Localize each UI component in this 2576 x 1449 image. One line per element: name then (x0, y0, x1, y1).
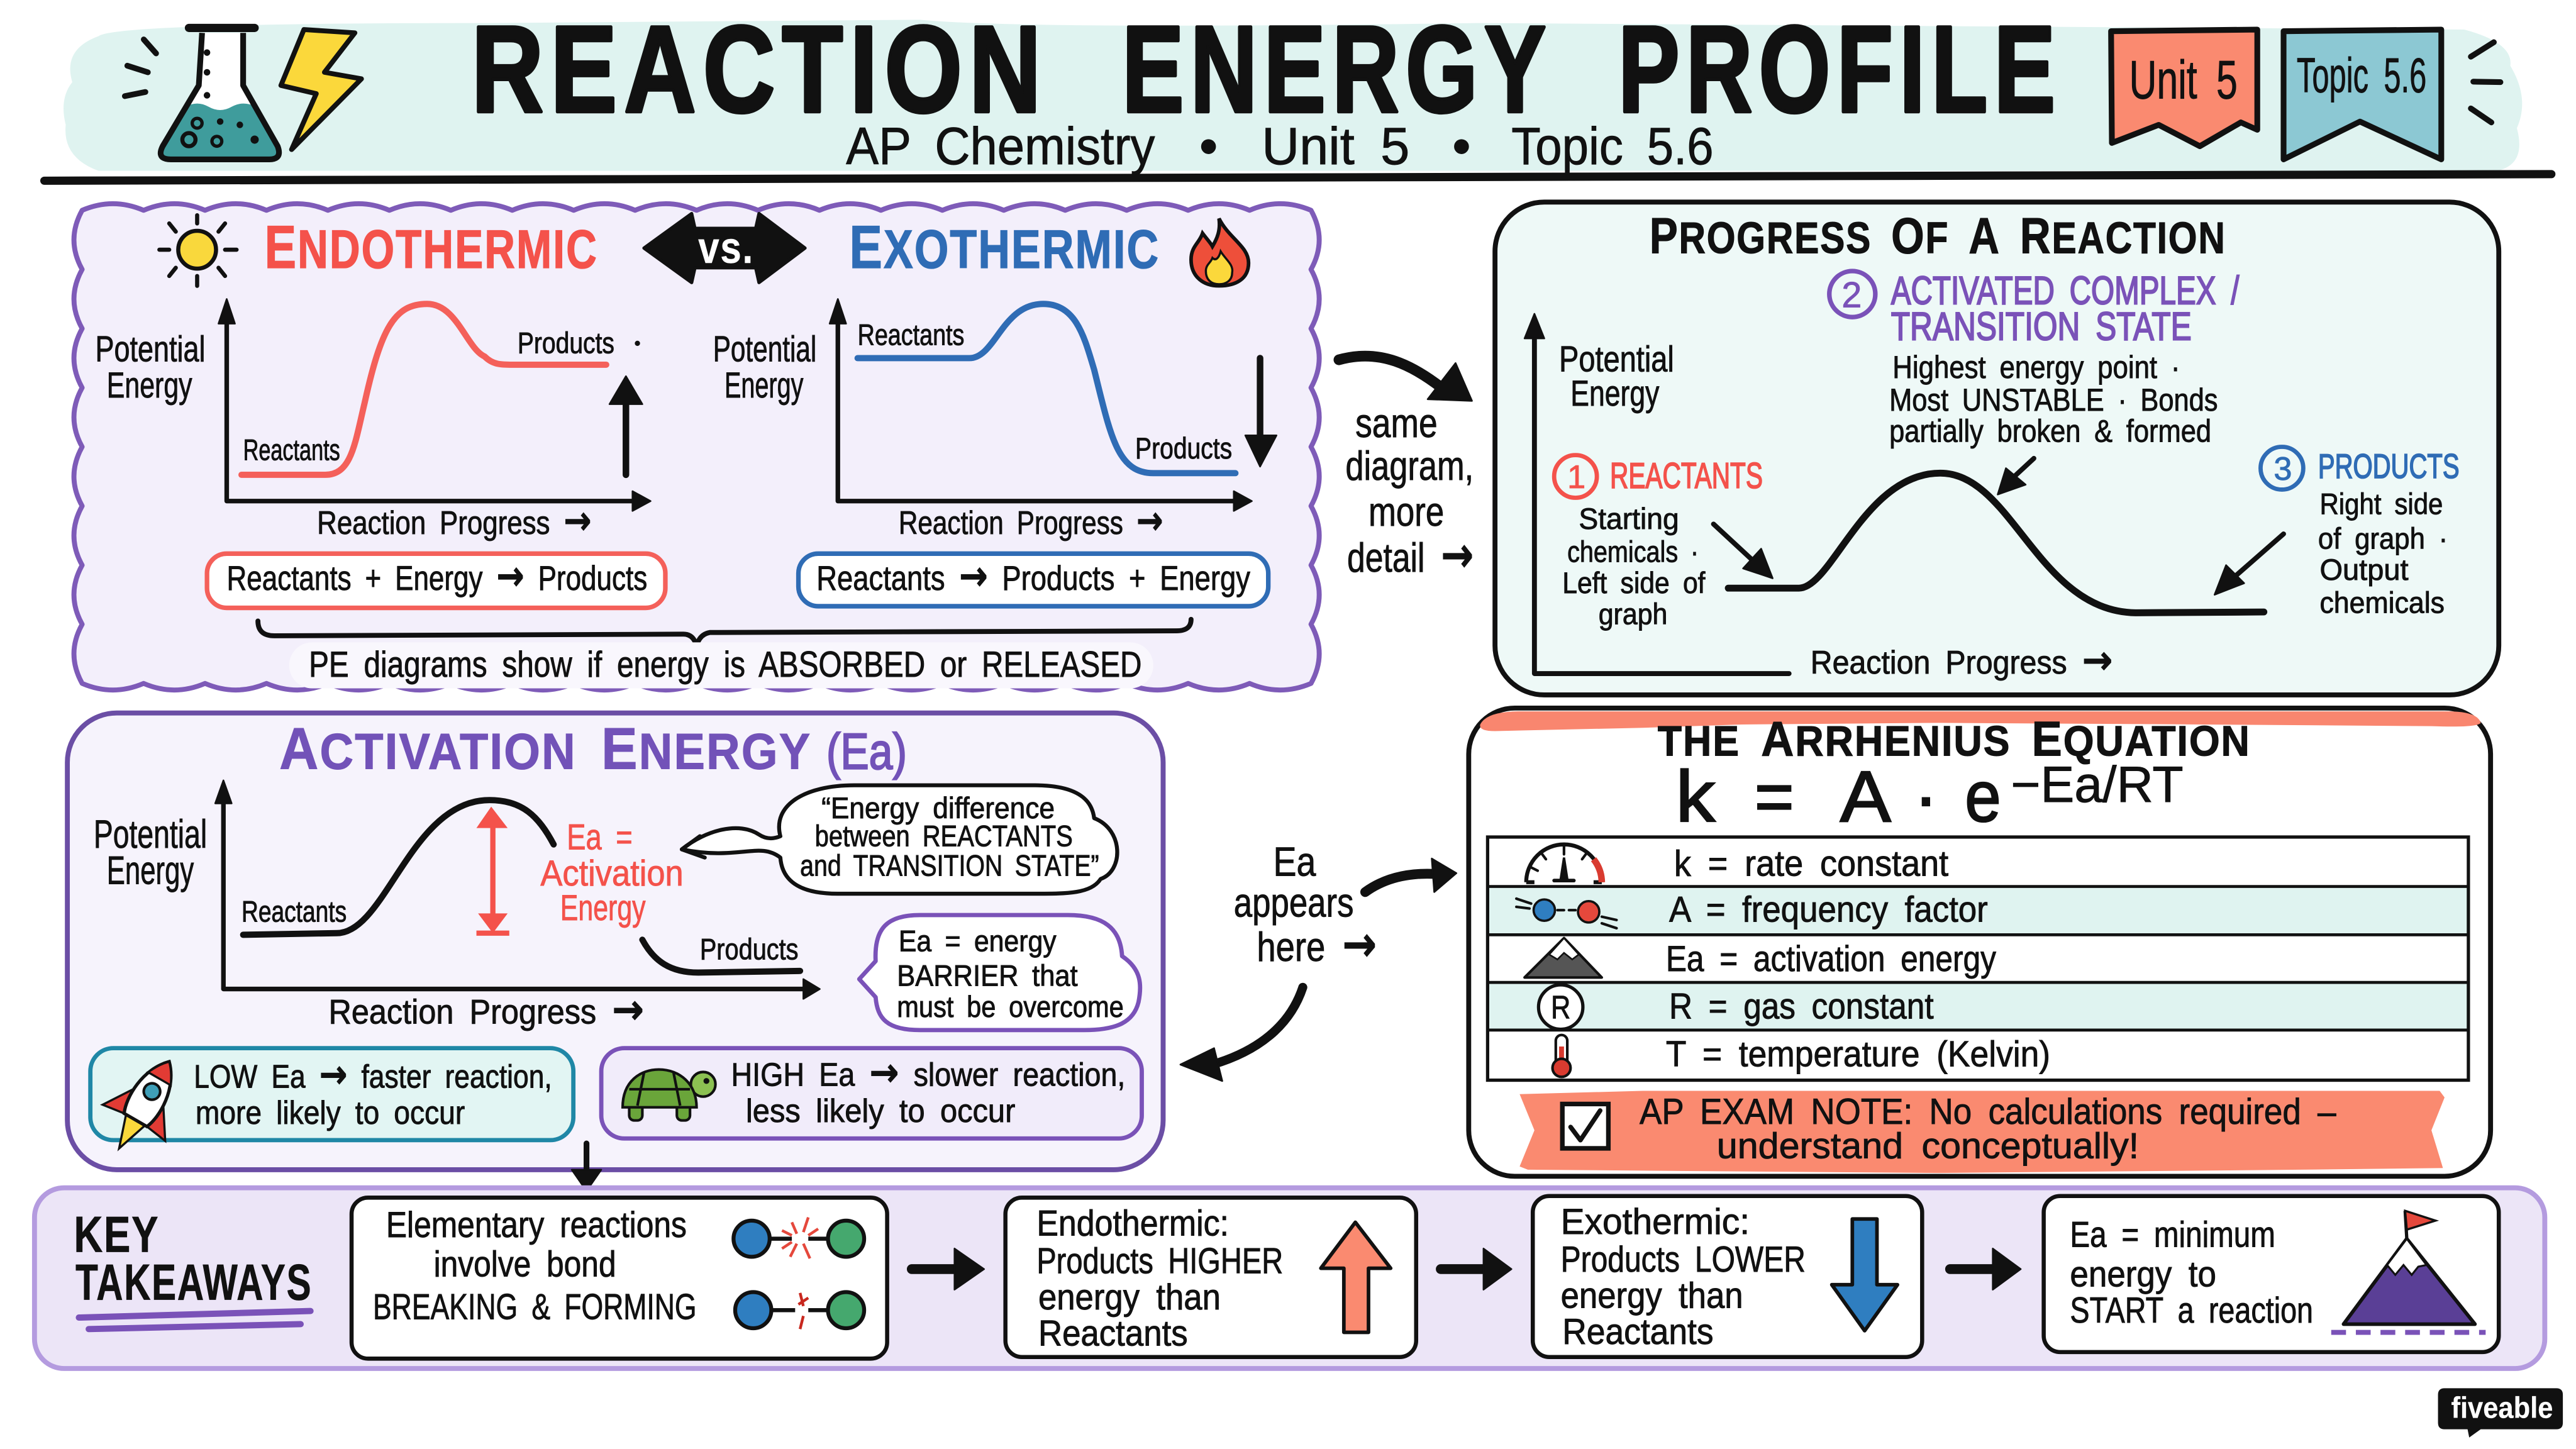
label: reactants: chemicals · (1567, 535, 1699, 568)
card: endothermic takeaway: Reactants (1038, 1313, 1188, 1353)
table: variables: T = temperature (Kelvin) (1666, 1034, 2050, 1074)
callout: energy difference: “Energy difference (821, 791, 1055, 824)
heading: progress of a reaction: PROGRESS OF A REACTION (1650, 208, 2226, 264)
label: reactants: 1 (1567, 459, 1585, 496)
callout: energy barrier: must be overcome (897, 990, 1124, 1023)
card: exothermic takeaway: energy than (1561, 1275, 1743, 1316)
box: high Ea (601, 1048, 1142, 1138)
label: Ea = activation energy: Energy (560, 888, 646, 928)
icon: rocket (88, 1043, 201, 1167)
chart: exothermic energy diagram: Products (1135, 431, 1232, 465)
chart: activation energy curve (94, 780, 820, 1033)
callout: energy barrier (859, 915, 1140, 1030)
arrow: to progress panel (1339, 356, 1472, 401)
card: Ea minimum: Ea = minimum (2070, 1215, 2275, 1255)
box: low Ea (91, 1048, 574, 1140)
heading: endothermic: ENDOTHERMIC (265, 214, 598, 281)
card: exothermic takeaway (1533, 1196, 1922, 1357)
ribbon: Topic 5.6 (2284, 30, 2441, 159)
box: high Ea: less likely to occur (746, 1093, 1015, 1130)
panel: progress of a reaction (1495, 202, 2499, 695)
chart: activation energy curve: Reactants (242, 894, 347, 928)
icon: summit flag (2331, 1211, 2485, 1333)
chart: exothermic energy diagram (713, 299, 1277, 543)
icon: right sparks (2471, 42, 2501, 123)
icon: up arrow (1321, 1223, 1391, 1333)
card: endothermic takeaway: Endothermic: (1036, 1203, 1229, 1243)
label: Ea = activation energy: Ea = (567, 818, 633, 858)
title (472, 1, 2062, 138)
callout: energy difference (682, 786, 1117, 894)
equation: k = A e^-Ea/RT: · (1914, 757, 1938, 837)
chart axes and curve: Reaction Progress → (1811, 637, 2112, 683)
connector text: same diagram, more detail: more (1368, 489, 1444, 535)
banner: AP exam note: AP EXAM NOTE: No calculations required – (1640, 1092, 2336, 1132)
card: Ea minimum (2044, 1196, 2499, 1352)
equation: k = A e^-Ea/RT: e (1965, 757, 2001, 837)
icon: down arrow (1832, 1219, 1897, 1331)
label: activated complex: TRANSITION STATE (1891, 305, 2192, 349)
equation: k = A e^-Ea/RT: −Ea/RT (2011, 757, 2184, 813)
title: PROFILE (1618, 1, 2062, 138)
label: activated complex: Highest energy point · (1892, 350, 2180, 385)
title: ENERGY (1122, 1, 1553, 138)
callout: energy difference: between REACTANTS (815, 819, 1073, 852)
arrow: to products (2214, 534, 2284, 595)
box: low Ea: LOW Ea → faster reaction, (194, 1051, 552, 1097)
card: endothermic takeaway (1006, 1197, 1416, 1357)
arrow: step 1 (912, 1248, 984, 1290)
banner: AP exam note: understand conceptually! (1717, 1126, 2139, 1167)
equation: k = A e^-Ea/RT: A (1840, 757, 1891, 837)
ribbon: Unit 5 (2111, 30, 2257, 146)
card: elementary reactions: involve bond (434, 1245, 616, 1285)
subtitle: Topic 5.6 (1511, 116, 1714, 175)
icon: turtle (623, 1070, 716, 1121)
logo: fiveable (2438, 1388, 2563, 1438)
card: elementary reactions (352, 1197, 887, 1358)
chart: endothermic energy diagram: Reactants (243, 433, 340, 466)
table: variables: A = frequency factor (1669, 889, 1988, 930)
chart: activation energy curve: Potential (94, 813, 207, 857)
label: activated complex (1829, 269, 2240, 449)
icon: lightning bolt (281, 30, 362, 150)
table: variables (1487, 837, 2468, 1080)
table: variables: Ea = activation energy (1666, 939, 1996, 979)
label: products: Output (2319, 553, 2409, 586)
card: exothermic takeaway: Products LOWER (1561, 1240, 1806, 1280)
panel: Arrhenius equation (1468, 708, 2490, 1176)
heading: activation energy: (Ea) (826, 724, 907, 780)
table: variables: k = rate constant (1674, 843, 1948, 884)
header band (45, 19, 2551, 180)
equation: exothermic: Reactants → Products + Energy (816, 552, 1250, 600)
table: variables: R = gas constant (1669, 987, 1934, 1027)
chart: exothermic energy diagram: Reaction Progress → (899, 497, 1163, 543)
card: exothermic takeaway: Reactants (1562, 1312, 1714, 1352)
label: activated complex: ACTIVATED COMPLEX / (1891, 269, 2240, 313)
arrow: activation energy height (477, 807, 509, 933)
chart: exothermic energy diagram: Potential (713, 330, 816, 370)
card: elementary reactions: Elementary reactions (386, 1205, 687, 1245)
label: reactants: graph (1599, 597, 1667, 631)
chart: endothermic energy diagram: Reaction Progress → (317, 497, 591, 543)
chart axes and curve: Potential (1559, 339, 1674, 379)
label: products: chemicals (2319, 586, 2445, 619)
arrow: step 2 (1441, 1248, 1511, 1290)
label: Ea = activation energy (540, 818, 684, 928)
panel: endothermic vs exothermic (74, 204, 1319, 690)
card: Ea minimum: energy to (2070, 1254, 2216, 1294)
label: products: PRODUCTS (2318, 447, 2460, 486)
label: products (2260, 447, 2460, 619)
heading: Arrhenius equation: THE ARRHENIUS EQUATION (1658, 711, 2251, 767)
box: low Ea: more likely to occur (196, 1095, 465, 1131)
icon: R: R (1551, 990, 1570, 1026)
icon: thermometer (1553, 1035, 1570, 1077)
chart: endothermic energy diagram (96, 299, 650, 543)
arrow: down to takeaways (572, 1143, 601, 1191)
icon: sun (159, 215, 236, 286)
callout: energy barrier: Ea = energy (899, 924, 1057, 957)
subtitle: • (1199, 116, 1218, 175)
connector text: same diagram, more detail (1345, 400, 1474, 584)
title: REACTION (472, 1, 1048, 138)
connector text: Ea appears here: appears (1234, 880, 1353, 926)
label: products: Right side (2319, 487, 2443, 521)
subtitle: • (1452, 116, 1470, 175)
chart: exothermic energy diagram: Energy (724, 365, 804, 406)
connector text: same diagram, more detail: same (1355, 400, 1438, 446)
connector text: same diagram, more detail: diagram, (1345, 443, 1474, 489)
arrow: to activation energy (1180, 987, 1303, 1081)
card: Ea minimum: START a reaction (2070, 1291, 2313, 1331)
chart axes and curve: Energy (1570, 374, 1660, 414)
label: activated complex: partially broken & formed (1889, 414, 2211, 449)
label: products: 3 (2273, 451, 2292, 487)
heading: key takeaways: KEY (74, 1207, 159, 1263)
chart: activation energy curve: Products (700, 933, 799, 966)
chart: endothermic energy diagram: Potential (96, 330, 206, 370)
equation: endothermic: Reactants + Energy → Products (226, 552, 647, 600)
icon: flask (160, 28, 279, 159)
ribbon: Topic 5.6: Topic 5.6 (2297, 47, 2426, 103)
label: reactants: REACTANTS (1610, 456, 1763, 496)
connector text: same diagram, more detail: detail → (1347, 526, 1474, 584)
subtitle (846, 116, 1714, 175)
label: reactants: Left side of (1562, 566, 1706, 599)
equation: k = A e^-Ea/RT (1675, 757, 2184, 837)
label: Ea = activation energy: Activation (540, 853, 684, 894)
chart: endothermic energy diagram: Products (518, 326, 614, 360)
panel: key takeaways (35, 1188, 2545, 1368)
card: endothermic takeaway: energy than (1038, 1277, 1221, 1318)
chart: exothermic energy diagram: Reactants (858, 318, 964, 352)
chart axes and curve (1524, 314, 2264, 683)
arrow: step 3 (1950, 1248, 2021, 1290)
icon: bond breaking (733, 1218, 864, 1258)
heading: key takeaways: TAKEAWAYS (75, 1254, 312, 1311)
callout: energy difference: and TRANSITION STATE” (800, 848, 1099, 882)
icon: flame (1191, 218, 1248, 286)
arrow: to reactants (1714, 524, 1773, 579)
ribbon: Unit 5: Unit 5 (2129, 50, 2238, 111)
panel: activation energy (67, 713, 1163, 1191)
icon: vs double arrow (644, 214, 805, 282)
caption: PE diagrams: PE diagrams show if energy is ABSORBED or RELEASED (309, 645, 1142, 685)
label: activated complex: 2 (1841, 275, 1862, 315)
subtitle: AP Chemistry (846, 116, 1155, 175)
arrow: to Arrhenius (1365, 858, 1457, 892)
equation: k = A e^-Ea/RT: k (1675, 757, 1716, 837)
chart: activation energy curve: Reaction Progress → (328, 985, 644, 1033)
label: activated complex: Most UNSTABLE · Bonds (1889, 382, 2218, 418)
card: exothermic takeaway: Exothermic: (1561, 1202, 1750, 1242)
banner: AP exam note (1519, 1091, 2445, 1173)
heading: key takeaways (74, 1207, 312, 1329)
icon: vs double arrow: vs. (698, 223, 754, 272)
icon: left sparks (125, 40, 156, 96)
arrow: to peak (1997, 458, 2034, 494)
callout: energy barrier: BARRIER that (897, 958, 1078, 992)
label: reactants: Starting (1579, 502, 1679, 535)
brace (258, 619, 1191, 646)
icon: mountain (1524, 938, 1602, 977)
equation: k = A e^-Ea/RT: = (1755, 757, 1794, 837)
icon: R (1538, 985, 1583, 1030)
chart: activation energy curve: Energy (107, 848, 194, 892)
icon: bond forming (735, 1292, 864, 1329)
chart: endothermic energy diagram: Energy (107, 365, 192, 406)
icon: gauge (1526, 845, 1602, 882)
card: endothermic takeaway: Products HIGHER (1036, 1241, 1283, 1281)
label: reactants (1554, 455, 1763, 631)
connector text: Ea appears here (1234, 838, 1377, 973)
card: elementary reactions: BREAKING & FORMING (373, 1287, 697, 1328)
logo: fiveable: fiveable (2451, 1391, 2553, 1424)
connector text: Ea appears here: Ea (1273, 838, 1316, 884)
subtitle: Unit 5 (1262, 116, 1409, 175)
heading: exothermic: EXOTHERMIC (850, 214, 1160, 281)
icon: colliding molecules (1516, 899, 1616, 928)
label: products: of graph · (2318, 521, 2448, 555)
heading: activation energy: ACTIVATION ENERGY (279, 716, 811, 782)
connector text: Ea appears here: here → (1257, 916, 1377, 973)
box: high Ea: HIGH Ea → slower reaction, (731, 1050, 1125, 1096)
